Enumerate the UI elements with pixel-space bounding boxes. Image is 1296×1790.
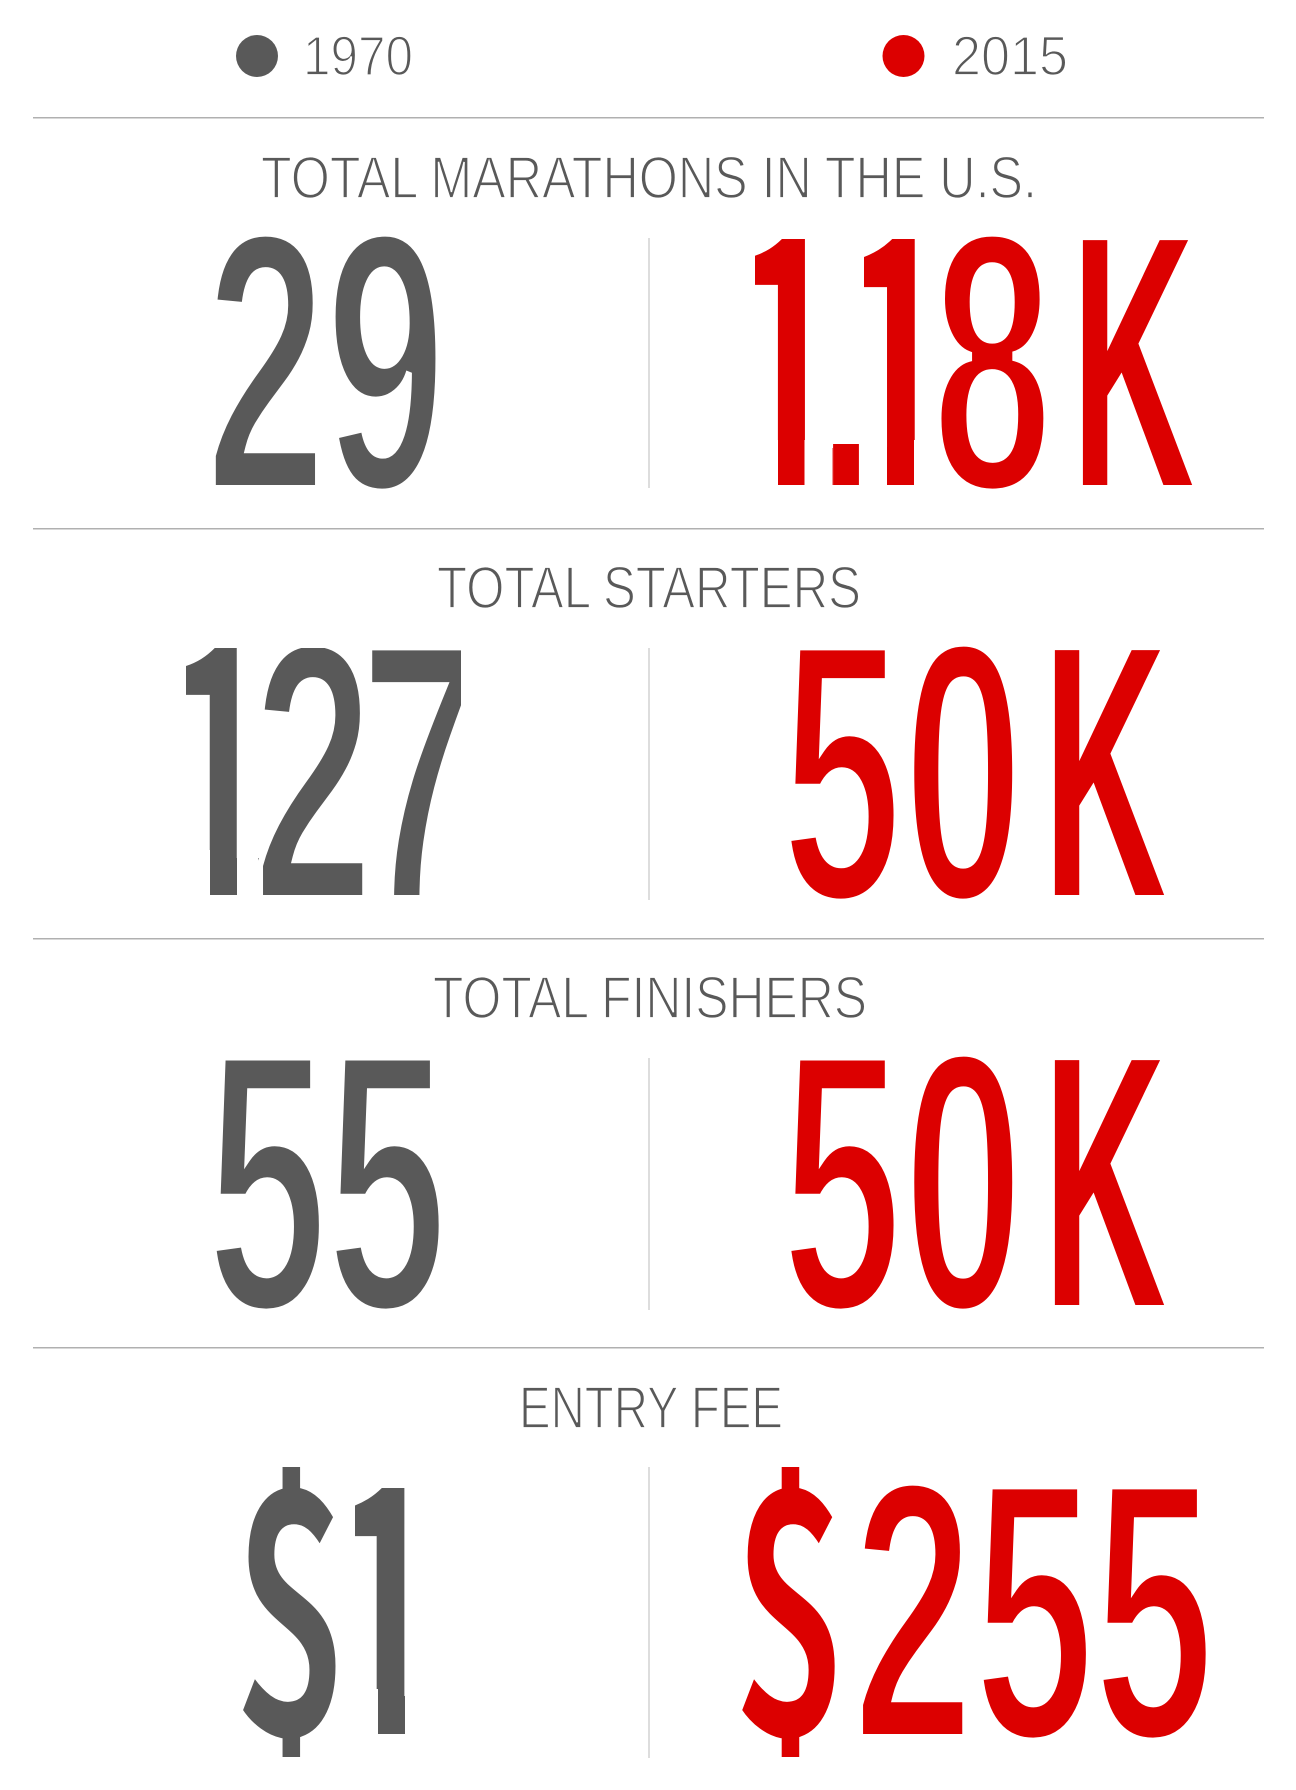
heading: entry fee: ENTRY FEE bbox=[519, 1375, 783, 1441]
number: 127: 2 bbox=[253, 566, 374, 979]
panel: total marathons bbox=[205, 83, 1194, 588]
number: 127 bbox=[186, 648, 461, 895]
number: 127: 1 bbox=[160, 501, 279, 996]
legend item: 2015: 2015 bbox=[952, 24, 1068, 87]
number: 1.18K bbox=[755, 236, 1192, 489]
number: 50K bbox=[781, 976, 1166, 1389]
number: 1.18K: 8 bbox=[932, 156, 1053, 569]
panel: total finishers bbox=[206, 965, 1166, 1389]
legend item: 1970: 1970 bbox=[303, 24, 413, 87]
number: 1.18K: K bbox=[1072, 164, 1194, 562]
number: 50K: 50 bbox=[781, 566, 1024, 979]
legend bbox=[236, 24, 1068, 87]
panel: entry fee bbox=[243, 1388, 1206, 1757]
number: 29: 29 bbox=[205, 156, 447, 569]
number: $255 bbox=[742, 1467, 1206, 1757]
number: $1 bbox=[243, 1467, 405, 1757]
heading: total marathons: TOTAL MARATHONS IN THE U.S. bbox=[261, 145, 1037, 211]
number: 1.18K: 1 bbox=[728, 91, 847, 586]
number: 50K: K bbox=[1044, 574, 1166, 972]
heading: total finishers: TOTAL FINISHERS bbox=[433, 965, 867, 1031]
legend item: 2015 bbox=[882, 24, 1068, 87]
number: 1.18K: . bbox=[821, 205, 872, 551]
number: 50K: 50 bbox=[781, 976, 1024, 1389]
number: 1.18K: 1 bbox=[836, 83, 958, 588]
panel: total starters bbox=[160, 501, 1166, 996]
number: 55: 55 bbox=[206, 976, 448, 1389]
number: 50K: K bbox=[1044, 984, 1166, 1382]
number: 50K bbox=[781, 566, 1166, 979]
legend item: 1970 bbox=[236, 24, 413, 87]
heading: total starters: TOTAL STARTERS bbox=[437, 555, 861, 621]
number: 127: 7 bbox=[360, 566, 481, 979]
